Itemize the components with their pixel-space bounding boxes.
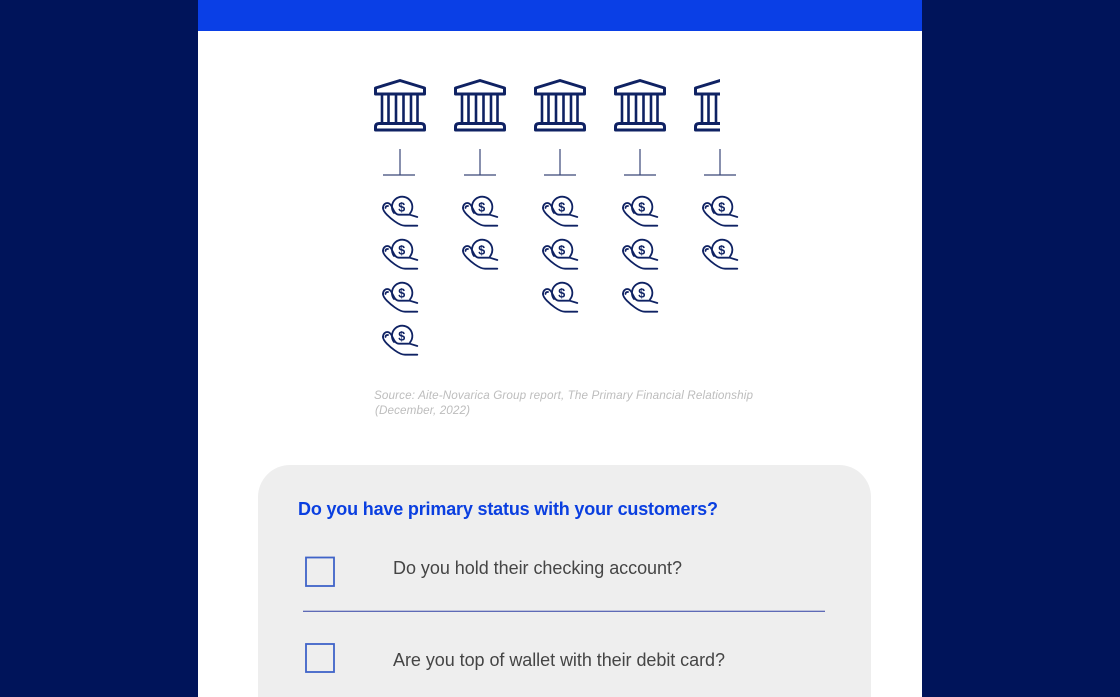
icon column 3: three money hands [543,197,577,312]
checkbox 2 [306,644,334,672]
panel: checklist [258,465,871,697]
top blue header band [198,0,922,31]
checkbox 1 [306,558,334,586]
white content sheet [198,0,922,697]
icon column 5: two money hands [703,197,737,269]
source note [374,389,753,417]
icon column 2: two money hands [463,197,497,269]
source note: (December, 2022) [375,404,470,417]
connector stems [383,149,736,175]
question 1: Do you hold their checking account? [393,558,682,578]
icon row: banks [376,80,744,130]
icon column 4: three money hands [623,197,657,312]
divider [303,611,825,612]
checklist heading: Do you have primary status with your customers? [298,499,718,519]
icon column 1: four money hands [383,197,417,355]
source note: Source: Aite-Novarica Group report, The Primary Financial Relationship [374,389,753,402]
question 2: Are you top of wallet with their debit card? [393,650,725,670]
